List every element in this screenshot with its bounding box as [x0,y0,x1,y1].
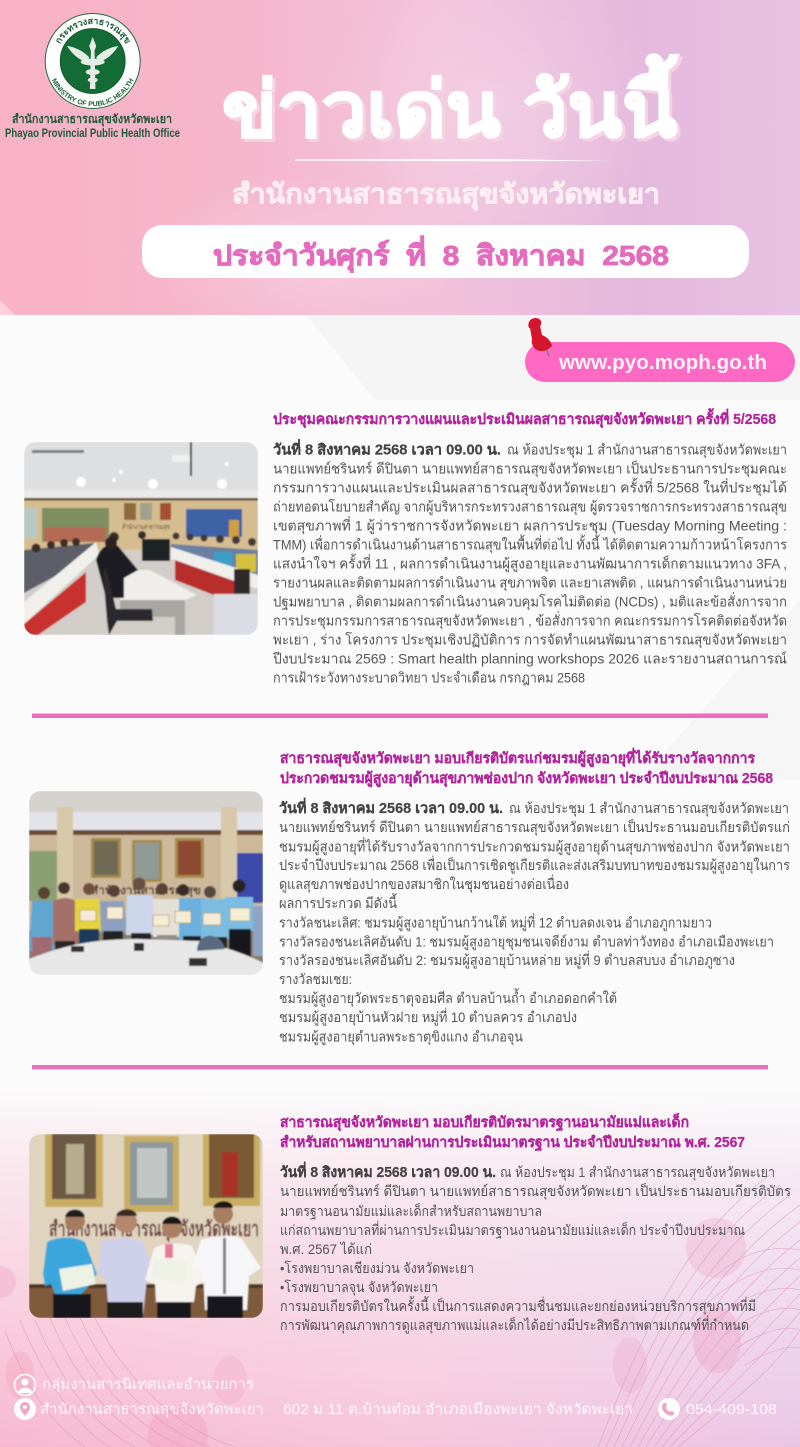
body text: news 1: พะเยา , ร่าง โครงการ ประชุมเชิงปฏิบัติการ การจัดทำแผนพัฒนาสาธารณสุขจังหวัดพะเยา [273,632,787,648]
date pill [142,225,749,278]
photo: hospital certificate presentation: สำนักงานสาธารณสุขจังหวัดพะเยา [49,1218,259,1243]
text: department: กลุ่มงานสารนิเทศและอำนวยการ [42,1377,254,1393]
heading: news 1: ประชุมคณะกรรมการวางแผนและประเมินผลสาธารณสุขจังหวัดพะเยา ครั้งที่ 5/2568 [273,408,776,428]
photo: committee meeting room: สำนักงานสาธารณสุข [122,523,170,531]
body text: news 2: ดูแลสุขภาพช่องปากของสมาชิกในชุมชนอย่างต่อเนื่อง [279,875,569,893]
logo caption [5,112,180,140]
text: office and address: สำนักงานสาธารณสุขจังหวัดพะเยา [40,1402,264,1418]
body text: news 2: ผลการประกวด มีดังนี้ [279,893,397,911]
body text: news 2: ชมรมผู้สูงอายุตำบลพระธาตุขิงแกง อำเภอจุน [279,1028,523,1046]
photo: hospital certificate presentation [29,1134,263,1318]
heading: news 2: ประกวดชมรมผู้สูงอายุด้านสุขภาพช่องปาก จังหวัดพะเยา ประจำปีงบประมาณ 2568 [280,770,773,787]
title: ข่าวเด่น วันนี้ [225,57,682,156]
subtitle: สำนักงานสาธารณสุขจังหวัดพะเยา [232,179,660,211]
divider [32,1065,768,1070]
body text: news 3: •โรงพยาบาลจุน จังหวัดพะเยา [280,1279,438,1296]
footer contact [14,1374,777,1420]
panel: news 3 [29,1112,791,1334]
date pill: ประจำวันศุกร์ ที่ 8 สิงหาคม 2568 [213,235,669,273]
logo: Ministry of Public Health seal [44,13,141,109]
body text: news 2: รางวัลชมเชย: [279,971,352,987]
heading: news 2: สาธารณสุขจังหวัดพะเยา มอบเกียรติบัตรแก่ชมรมผู้สูงอายุที่ได้รับรางวัลจากการ [280,747,755,767]
body text: news 1: นายแพทย์ชรินทร์ ดีปินตา นายแพทย์สาธารณสุขจังหวัดพะเยา เป็นประธานการประชุมคณะ [273,460,787,478]
title underline [295,159,614,161]
heading: news 3: สาธารณสุขจังหวัดพะเยา มอบเกียรติบัตรมาตรฐานอนามัยแม่และเด็ก [280,1112,689,1132]
logo: Ministry of Public Health seal: MINISTRY OF PUBLIC HEALTH [52,78,134,106]
body text: news 2: รางวัลรองชนะเลิศอันดับ 2: ชมรมผู้สูงอายุบ้านหล่าย หมู่ที่ 9 ตำบลสบบง อำเภอภูซาง [279,951,735,969]
body text: news 1 [273,438,787,686]
body text: news 1: วันที่ 8 สิงหาคม 2568 เวลา 09.00 น. [273,438,501,458]
heading: news 3 [280,1112,745,1152]
body text: news 1: ปีงบประมาณ 2569 : Smart health planning workshops 2026 และรายงานสถานการณ์ [273,650,787,666]
body text: news 3: มาตรฐานอนามัยแม่และเด็กสำหรับสถานพยาบาล [280,1202,542,1220]
text: office and address: 602 ม.11 ต.บ้านต๋อม อำเภอเมืองพะเยา จังหวัดพะเยา [283,1401,633,1418]
panel: news 2 [29,747,790,1046]
icon: person [14,1374,36,1396]
body background [0,315,800,1447]
heading: news 3: สำหรับสถานพยาบาลผ่านการประเมินมาตรฐาน ประจำปีงบประมาณ พ.ศ. 2567 [280,1134,745,1152]
body text: news 3: แก่สถานพยาบาลที่ผ่านการประเมินมาตรฐานงานอนามัยแม่และเด็ก ประจำปีงบประมาณ [280,1221,745,1239]
icon: location pin [14,1398,36,1420]
icon: red push pin [528,318,552,356]
text: office and address [40,1401,633,1418]
body text: news 2: วันที่ 8 สิงหาคม 2568 เวลา 09.00 น. [279,797,503,817]
body text: news 1: การเฝ้าระวังทางระบาดวิทยา ประจำเดือน กรกฎาคม 2568 [273,670,585,686]
text: phone number: 054-409-108 [686,1402,777,1418]
panel: news 1 [24,408,787,686]
website pill: www.pyo.moph.go.th [558,351,767,374]
body text: news 2: ชมรมผู้สูงอายุบ้านหัวฝาย หมู่ที่ 10 ตำบลควร อำเภอปง [279,1008,577,1026]
website pill [525,342,795,382]
body text: news 3 [280,1161,791,1334]
photo: certificate presentation to senior clubs: สำนักงานสาธารณสุข [91,884,201,898]
body text: news 1: กรรมการวางแผนและประเมินผลสาธารณสุขจังหวัดพะเยา ครั้งที่ 5/2568 ในที่ประชุมได้ [273,478,787,496]
icon: caduceus [67,37,118,89]
heading: news 2 [280,747,773,787]
body text: news 3: พ.ศ. 2567 ได้แก่ [280,1241,372,1257]
title: ข่าวเด่น วันนี้ [222,54,679,153]
body text: news 3: •โรงพยาบาลเชียงม่วน จังหวัดพะเยา [280,1260,474,1276]
body text: news 3: นายแพทย์ชรินทร์ ดีปินตา นายแพทย์สาธารณสุขจังหวัดพะเยา เป็นประธานมอบเกียรติบัตร [280,1182,791,1200]
photo: certificate presentation to senior clubs [29,791,263,975]
divider [32,714,768,718]
body text: news 3: ณ ห้องประชุม 1 สำนักงานสาธารณสุขจังหวัดพะเยา [500,1164,775,1181]
body text: news 3: การมอบเกียรติบัตรในครั้งนี้ เป็นการแสดงความชื่นชมและยกย่องหน่วยบริการสุขภาพที่มี [280,1296,756,1315]
logo caption: Phayao Provincial Public Health Office [5,128,180,140]
body text: news 3: การพัฒนาคุณภาพการดูแลสุขภาพแม่และเด็กได้อย่างมีประสิทธิภาพตามเกณฑ์ที่กำหนด [280,1316,749,1334]
body text: news 1: แสงนำใจฯ ครั้งที่ 11 , ผลการดำเนินงานผู้สูงอายุและงานพัฒนาการเด็กตามแนวทาง 3FA , [273,554,787,572]
icon: phone [658,1398,680,1420]
body text: news 1: เขตสุขภาพที่ 1 ผู้ว่าราชการจังหวัดพะเยา ผลการประชุม (Tuesday Morning Meeting : [273,516,787,534]
body text: news 2: ชมรมผู้สูงอายุวัดพระธาตุจอมศีล ตำบลบ้านถ้ำ อำเภอดอกคำใต้ [279,988,617,1007]
header background [0,0,800,350]
body text: news 2 [279,797,790,1046]
body text: news 3: วันที่ 8 สิงหาคม 2568 เวลา 09.00 น. [280,1161,496,1181]
logo caption: สำนักงานสาธารณสุขจังหวัดพะเยา [12,112,172,127]
photo: committee meeting room [24,442,258,635]
logo: Ministry of Public Health seal: กระทรวงสาธารณสุข [56,18,130,44]
body text: news 2: รางวัลชนะเลิศ: ชมรมผู้สูงอายุบ้านกว้านใต้ หมู่ที่ 12 ตำบลดงเจน อำเภอภูกามยาว [279,914,712,932]
